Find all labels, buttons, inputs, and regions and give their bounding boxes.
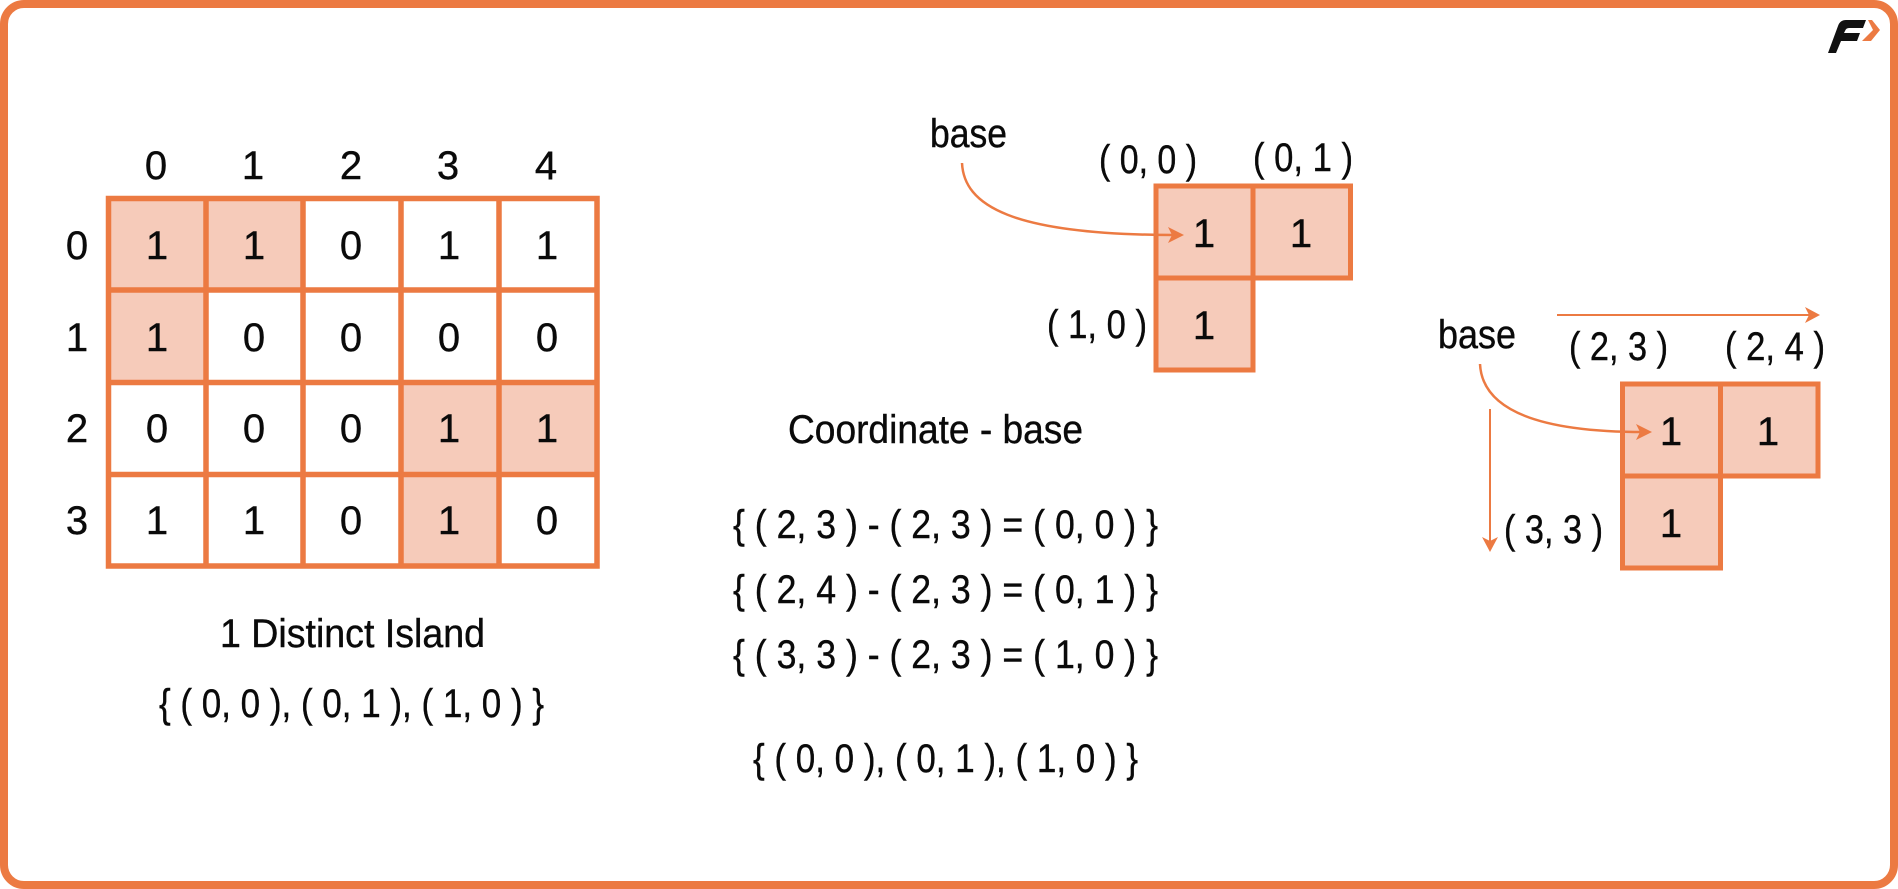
row labels: 2 <box>66 407 88 451</box>
cell values: 1 <box>1193 304 1215 348</box>
row labels: 3 <box>66 499 88 543</box>
cell dividers <box>1622 384 1720 476</box>
column labels: 2 <box>340 144 362 188</box>
arrow: base to first cell <box>962 163 1184 243</box>
cell values: 1 <box>438 499 460 543</box>
arrow: row direction <box>1482 409 1498 552</box>
column labels: 3 <box>437 144 459 188</box>
label: coordinate 2,4: ( 2, 4 ) <box>1725 325 1825 369</box>
cell values: 1 <box>1660 502 1682 546</box>
arrow: base to second cell <box>1480 364 1652 440</box>
cell values: 0 <box>243 407 265 451</box>
cell values: 1 <box>1193 212 1215 256</box>
text: subtraction equations <box>733 503 1158 677</box>
cell values: 1 <box>243 224 265 268</box>
text: coordinate minus base heading: Coordinate - base <box>788 408 1083 452</box>
cell values: 1 <box>1757 410 1779 454</box>
cell values: 1 <box>146 499 168 543</box>
cell values <box>146 224 558 543</box>
cell values <box>1660 410 1779 546</box>
cell values <box>1193 212 1312 348</box>
cell values: 0 <box>243 316 265 360</box>
label: base: base <box>1438 313 1516 357</box>
cell dividers <box>1156 186 1253 278</box>
column labels: 0 <box>145 144 167 188</box>
cell values: 0 <box>438 316 460 360</box>
panel: first island shape <box>930 112 1353 370</box>
label: coordinate 2,3: ( 2, 3 ) <box>1569 325 1668 369</box>
text: subtraction equations: { ( 2, 4 ) - ( 2, 3 ) = ( 0, 1 ) } <box>733 568 1158 612</box>
icon: brand logo <box>1828 20 1880 53</box>
cell values: 0 <box>340 224 362 268</box>
cell values: 0 <box>536 316 558 360</box>
cell values: 1 <box>438 224 460 268</box>
cell values: 1 <box>536 407 558 451</box>
panel: grid with column and row labels <box>66 144 597 566</box>
label: coordinate 3,3: ( 3, 3 ) <box>1504 508 1603 552</box>
column labels <box>145 144 557 188</box>
label: base: base <box>930 112 1007 156</box>
text: subtraction equations: { ( 2, 3 ) - ( 2, 3 ) = ( 0, 0 ) } <box>733 503 1158 547</box>
grid lines <box>108 198 597 566</box>
arrow: column direction <box>1557 307 1820 323</box>
cell values: 1 <box>243 499 265 543</box>
row labels: 0 <box>66 224 88 268</box>
column labels: 1 <box>242 144 264 188</box>
text: distinct island caption: 1 Distinct Island <box>220 612 485 656</box>
label: coordinate 0,0: ( 0, 0 ) <box>1099 138 1197 182</box>
cell values: 1 <box>1660 410 1682 454</box>
cell values: 0 <box>340 407 362 451</box>
cell values: 1 <box>146 224 168 268</box>
panel: second island shape <box>1438 307 1825 568</box>
text: island coordinate set: { ( 0, 0 ), ( 0, 1 ), ( 1, 0 ) } <box>159 682 544 726</box>
cell values: 0 <box>340 499 362 543</box>
row labels <box>66 224 88 543</box>
cell values: 0 <box>146 407 168 451</box>
cell values: 0 <box>340 316 362 360</box>
island cells <box>1156 186 1350 370</box>
cell values: 1 <box>1290 212 1312 256</box>
text: subtraction equations: { ( 3, 3 ) - ( 2, 3 ) = ( 1, 0 ) } <box>733 633 1158 677</box>
highlighted island cells <box>108 198 597 566</box>
cell values: 1 <box>438 407 460 451</box>
row labels: 1 <box>66 316 88 360</box>
cell values: 1 <box>536 224 558 268</box>
text: normalized coordinate set: { ( 0, 0 ), ( 0, 1 ), ( 1, 0 ) } <box>753 737 1138 781</box>
label: coordinate 0,1: ( 0, 1 ) <box>1253 136 1353 180</box>
label: coordinate 1,0: ( 1, 0 ) <box>1047 303 1147 347</box>
column labels: 4 <box>535 144 557 188</box>
cell values: 1 <box>146 316 168 360</box>
cell values: 0 <box>536 499 558 543</box>
island cells <box>1622 384 1818 568</box>
